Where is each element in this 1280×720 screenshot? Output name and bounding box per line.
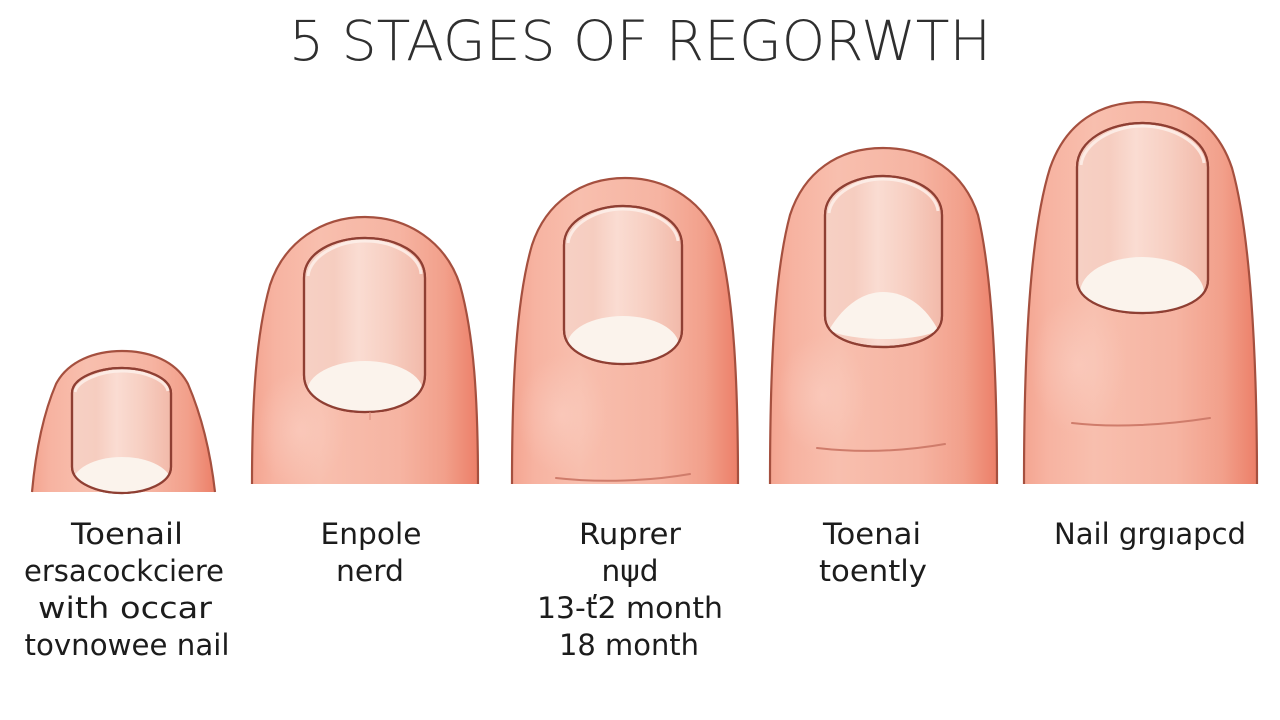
title: 5 STAGES OF REGORWTH — [289, 9, 991, 73]
label stage 2 — [320, 517, 422, 588]
finger stage 1 — [32, 351, 215, 511]
label stage 2: Enpole — [320, 517, 422, 551]
label stage 3 — [537, 517, 723, 662]
label stage 3: Ruprer — [579, 517, 681, 551]
label stage 2: nerd — [336, 554, 404, 588]
label stage 3: nψd — [602, 554, 658, 588]
label stage 1: tovnowee nail — [24, 628, 230, 662]
label stage 3: 18 month — [559, 628, 699, 662]
label stage 4 — [819, 517, 927, 588]
nail stage 1 — [72, 368, 172, 511]
label stage 1 — [24, 517, 230, 662]
nail stage 2 — [304, 238, 425, 423]
finger stage 5 — [1024, 102, 1257, 484]
label stage 5: Nail grgıapcd — [1054, 517, 1246, 551]
label stage 4: toently — [819, 554, 927, 588]
finger stage 4 — [770, 148, 997, 484]
nail stage 4 — [825, 176, 942, 347]
nail tick stage 2 — [369, 412, 371, 420]
label stage 1: Toenail — [70, 517, 183, 551]
label stage 3: 13-ť2 month — [537, 591, 723, 625]
nail stage 5 — [1077, 123, 1208, 329]
crease stage 3 — [556, 474, 690, 481]
label stage 1: ersacockciere — [24, 554, 224, 588]
crease stage 5 — [1072, 418, 1210, 425]
crease stage 4 — [817, 444, 945, 451]
finger stage 3 — [512, 178, 738, 484]
label stage 4: Toenai — [822, 517, 921, 551]
finger stage 2 — [252, 217, 478, 490]
label stage 1: with occar — [38, 591, 212, 625]
nail stage 3 — [564, 206, 682, 376]
